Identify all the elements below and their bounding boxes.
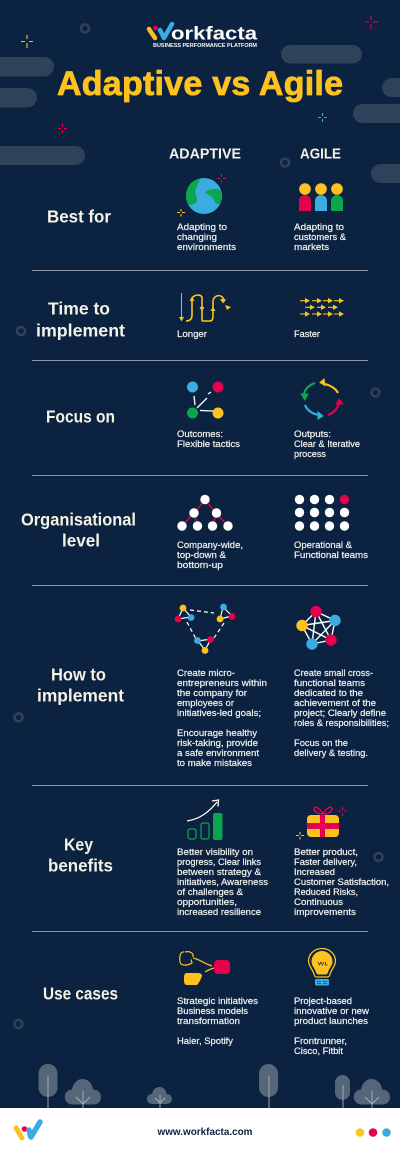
text: adaptive how to: employees or	[177, 698, 234, 708]
logo: BUSINESS PERFORMANCE PLATFORM	[153, 43, 257, 49]
text: outputs: Clear & Iterative	[294, 439, 360, 449]
text: agile use cases	[294, 996, 370, 1056]
icon: people	[299, 183, 343, 211]
row: key benefits	[48, 800, 389, 917]
text: adaptive benefits: between strategy &	[177, 867, 261, 877]
text: outcomes: Outcomes:	[177, 429, 223, 439]
text: operational: Functional teams	[294, 550, 369, 560]
text: agile best for: customers &	[294, 232, 346, 242]
heading: best for: Best for	[47, 206, 111, 226]
heading: focus on: Focus on	[46, 406, 115, 426]
text: adaptive how to	[177, 668, 267, 768]
text: longer: Longer	[177, 329, 207, 339]
text: operational	[294, 540, 369, 560]
icon: gift	[307, 807, 339, 837]
text: adaptive how to: to make mistakes	[177, 758, 253, 768]
text: adaptive best for	[177, 222, 237, 252]
trees	[38, 1064, 390, 1108]
text: adaptive benefits: Better visibility on	[177, 847, 253, 857]
column heading: agile: AGILE	[300, 146, 341, 162]
text: agile best for: Adapting to	[294, 222, 344, 232]
text: adaptive benefits: increased resilience	[177, 907, 261, 917]
icon: globe	[186, 178, 222, 214]
row: how to implement	[37, 604, 389, 768]
title: Adaptive vs Agile	[57, 65, 343, 103]
icon: mesh network	[296, 606, 341, 650]
icon: light bulb	[308, 948, 336, 986]
row: organisational level	[21, 495, 369, 570]
text: adaptive how to: a safe environment	[177, 748, 260, 758]
text: agile how to: achievement of the	[294, 698, 376, 708]
text: agile use cases: innovative or new	[294, 1006, 370, 1016]
text: adaptive use cases: Business models	[177, 1006, 249, 1016]
text: agile how to: functional teams	[294, 678, 366, 688]
text: adaptive how to: the company for	[177, 688, 247, 698]
text: adaptive benefits: of challenges &	[177, 887, 243, 897]
heading: time to implement: Time to	[48, 298, 110, 318]
icon: hierarchy	[177, 495, 233, 531]
text: company-wide: top-down &	[177, 550, 226, 560]
text: agile benefits: improvements	[294, 907, 357, 917]
heading: how to implement: How to	[51, 664, 106, 684]
text: adaptive how to: risk-taking, provide	[177, 738, 258, 748]
text: adaptive use cases: Strategic initiatives	[177, 996, 259, 1006]
text: operational: Operational &	[294, 540, 352, 550]
heading: key benefits: Key	[64, 834, 93, 854]
row: time to implement	[36, 293, 344, 340]
text: adaptive benefits: opportunities,	[177, 897, 237, 907]
heading: how to implement	[37, 664, 124, 706]
footer	[0, 1108, 400, 1156]
text: company-wide	[177, 540, 243, 570]
text: agile benefits: Faster delivery,	[294, 857, 357, 867]
text: agile how to: dedicated to the	[294, 688, 363, 698]
icon: strategy map	[180, 952, 230, 985]
footer logo	[16, 1122, 40, 1138]
text: outcomes: Flexible tactics	[177, 439, 241, 449]
logo: orkfacta	[171, 24, 258, 44]
text: adaptive best for: changing	[177, 232, 217, 242]
text: agile how to: roles & responsibilities;	[294, 718, 389, 728]
text: adaptive benefits: initiatives, Awareness	[177, 877, 269, 887]
text: agile best for	[294, 222, 346, 252]
icon: growth chart	[187, 800, 222, 840]
icon: iterative cycle	[301, 379, 343, 419]
text: agile benefits: Reduced Risks,	[294, 887, 358, 897]
text: agile use cases: product launches	[294, 1016, 369, 1026]
heading: how to implement: implement	[37, 686, 124, 706]
text: adaptive best for: environments	[177, 242, 237, 252]
text: company-wide: bottom-up	[177, 560, 223, 570]
icon: dot grid	[295, 495, 349, 531]
heading: organisational level: Organisational	[21, 510, 136, 530]
text: agile how to: Focus on the	[294, 738, 348, 748]
text: agile how to: project; Clearly define	[294, 708, 386, 718]
text: agile best for: markets	[294, 242, 330, 252]
icon: winding path	[179, 293, 231, 322]
text: adaptive how to: entrepreneurs within	[177, 678, 267, 688]
heading: use cases: Use cases	[43, 984, 118, 1004]
logo	[149, 24, 258, 49]
text: agile how to: delivery & testing.	[294, 748, 368, 758]
text: agile how to	[294, 668, 389, 758]
row: focus on	[46, 379, 360, 459]
text: adaptive best for: Adapting to	[177, 222, 227, 232]
text: adaptive use cases: Haier, Spotify	[177, 1036, 234, 1046]
column heading: adaptive: ADAPTIVE	[169, 146, 241, 162]
text: adaptive use cases: transformation	[177, 1016, 240, 1026]
text: agile benefits: Increased	[294, 867, 335, 877]
row: best for	[47, 178, 346, 252]
text: agile benefits: Continuous	[294, 897, 344, 907]
footer dots	[356, 1128, 391, 1137]
text: agile use cases: Frontrunner,	[294, 1036, 347, 1046]
text: adaptive benefits	[177, 847, 269, 917]
text: adaptive use cases	[177, 996, 259, 1046]
text: outputs: Outputs:	[294, 429, 331, 439]
text: agile use cases: Project-based	[294, 996, 352, 1006]
text: agile use cases: Cisco, Fitbit	[294, 1046, 344, 1056]
text: outputs: process	[294, 449, 327, 459]
heading: key benefits	[48, 834, 113, 876]
website: www.workfacta.com	[157, 1127, 253, 1138]
text: adaptive benefits: progress, Clear links	[177, 857, 262, 867]
icon: micro teams network	[175, 604, 235, 654]
text: agile how to: Create small cross-	[294, 668, 373, 678]
text: agile benefits	[294, 847, 389, 917]
heading: key benefits: benefits	[48, 856, 113, 876]
text: agile benefits: Better product,	[294, 847, 358, 857]
text: adaptive how to: initiatives-led goals;	[177, 708, 261, 718]
heading: organisational level: level	[62, 530, 100, 550]
text: company-wide: Company-wide,	[177, 540, 243, 550]
icon: fast arrows	[300, 298, 344, 317]
text: outputs	[294, 429, 360, 459]
text: faster: Faster	[294, 329, 320, 339]
text: adaptive how to: Create micro-	[177, 668, 235, 678]
text: agile benefits: Customer Satisfaction,	[294, 877, 389, 887]
text: outcomes	[177, 429, 241, 449]
heading: time to implement: implement	[36, 320, 125, 340]
text: adaptive how to: Encourage healthy	[177, 728, 258, 738]
row: use cases	[43, 948, 370, 1056]
icon: connected nodes	[187, 382, 224, 418]
heading: organisational level	[21, 510, 136, 550]
heading: time to implement	[36, 298, 125, 340]
